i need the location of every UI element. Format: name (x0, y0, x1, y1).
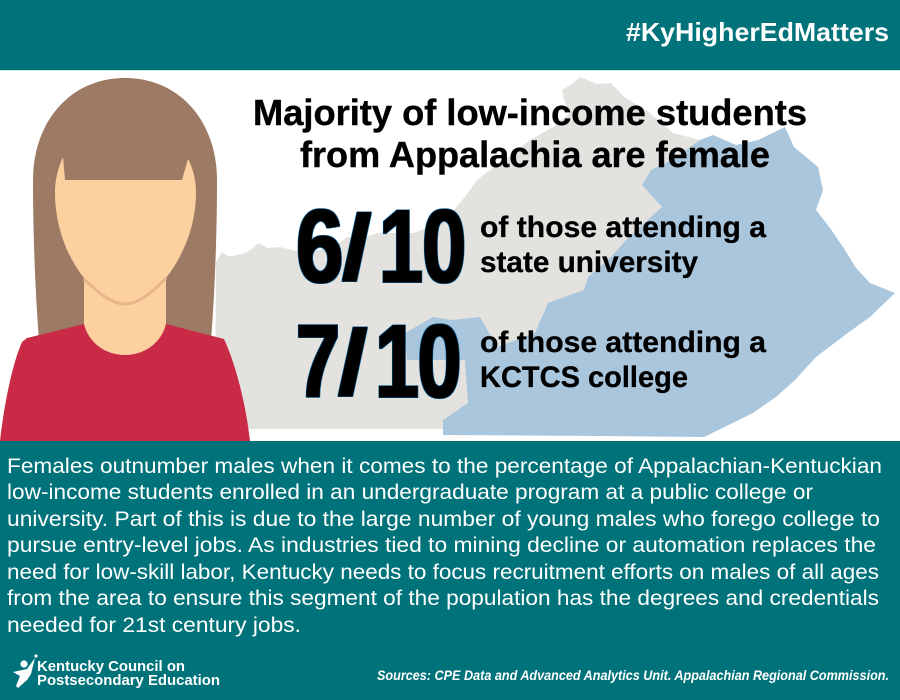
map: Appalachian region (405, 127, 895, 437)
number 6/10: 1 (379, 187, 423, 305)
description: KCTCS college (480, 361, 688, 394)
number 7/10: 7 (296, 302, 340, 420)
statistic: state university (296, 187, 766, 305)
logo: Kentucky Council on Postsecondary Education (13, 654, 220, 689)
title: Majority of low-income students (253, 92, 807, 133)
number 6/10: 0 (422, 187, 466, 305)
body text: university. Part of this is due to the large number of young males who forego college to (7, 507, 880, 531)
body text (7, 454, 882, 637)
number 6/10: 6 (296, 189, 343, 305)
logo text: Kentucky Council on (37, 658, 185, 675)
number 6/10: / (342, 196, 371, 299)
shirt (0, 324, 250, 441)
number 7/10: 0 (418, 302, 462, 420)
description: of those attending a (480, 211, 766, 244)
body text: from the area to ensure this segment of the population has the degrees and credentials (7, 586, 879, 610)
body text: need for low-skill labor, Kentucky needs to focus recruitment efforts on males of all ages (7, 560, 879, 584)
number 7/10: 1 (375, 302, 419, 420)
icon: figure with star (13, 654, 38, 688)
chin shadow (84, 278, 166, 304)
neck (84, 276, 166, 355)
footer panel (0, 441, 900, 700)
body text: pursue entry-level jobs. As industries tied to mining decline or automation replaces the (7, 533, 876, 557)
number 7/10: / (338, 311, 367, 414)
logo text: Postsecondary Education (37, 672, 220, 689)
statistic: KCTCS college (296, 302, 766, 420)
title: from Appalachia are female (300, 134, 770, 175)
body text: low-income students enrolled in an undergraduate program at a public college or (7, 480, 813, 504)
logo text (37, 658, 220, 689)
hair (33, 78, 217, 345)
description (480, 211, 766, 279)
header band (0, 0, 900, 71)
map of Kentucky (215, 77, 895, 437)
hashtag: #KyHigherEdMatters (626, 17, 889, 47)
number 7/10 (296, 302, 462, 420)
body text: needed for 21st century jobs. (7, 613, 301, 637)
description: state university (480, 246, 698, 279)
description (480, 326, 766, 394)
face (55, 157, 196, 302)
number 6/10 (296, 187, 466, 305)
body text: Females outnumber males when it comes to the percentage of Appalachian-Kentuckian (7, 454, 882, 478)
title (253, 92, 807, 175)
description: of those attending a (480, 326, 766, 359)
illustration: woman (0, 78, 250, 441)
map: non-Appalachian region (215, 77, 720, 429)
